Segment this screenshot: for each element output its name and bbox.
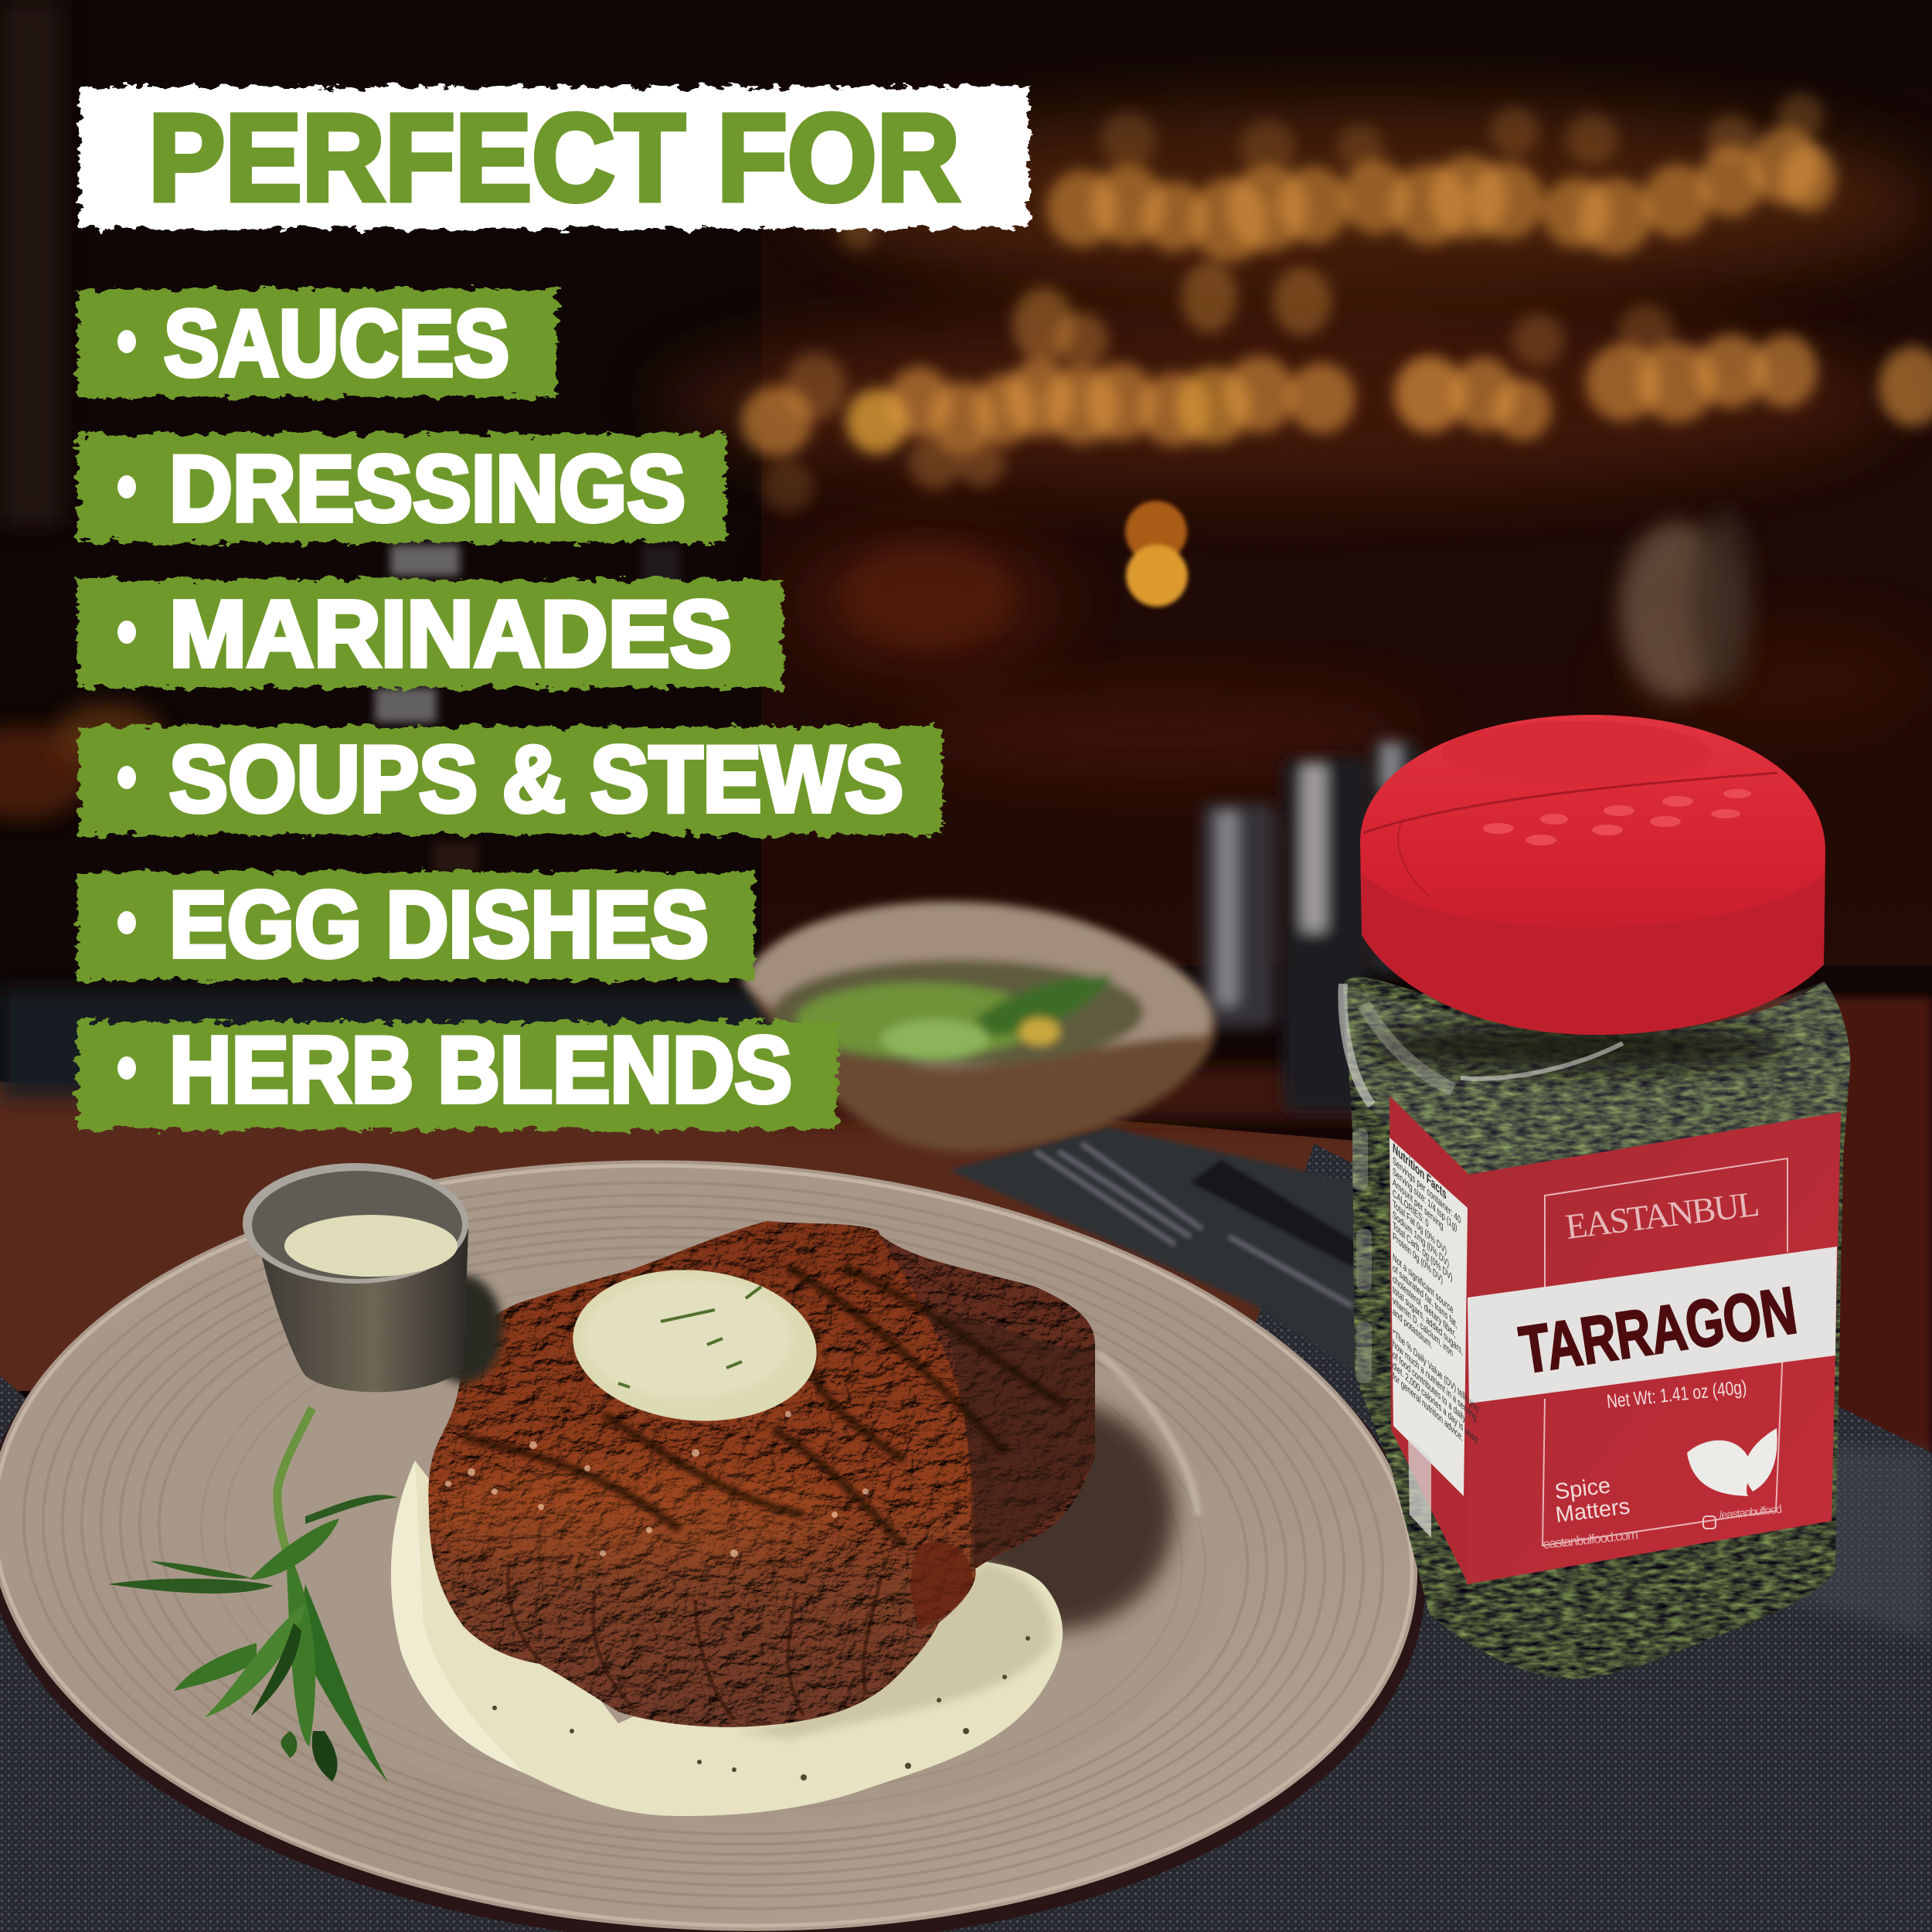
list item: herb blends: HERB BLENDS bbox=[169, 1017, 792, 1122]
sauce pool bbox=[391, 1461, 1063, 1816]
list item: sauces: SAUCES bbox=[164, 291, 509, 396]
nutrition panel: Servings per container: 40 bbox=[1393, 1155, 1461, 1226]
nutrition panel: Amount per serving bbox=[1393, 1176, 1444, 1233]
list item: marinades: MARINADES bbox=[169, 581, 732, 686]
list item: egg dishes: EGG DISHES bbox=[169, 872, 709, 977]
nutrition panel: cholesterol, dietary fiber, bbox=[1393, 1273, 1456, 1341]
website: eastanbulfood.com bbox=[1542, 1527, 1639, 1552]
brand name: EASTANBUL bbox=[1563, 1184, 1761, 1247]
label front panel bbox=[1467, 1112, 1841, 1584]
steak bbox=[428, 1221, 1095, 1727]
wine glasses bbox=[375, 545, 680, 873]
nutrition panel: diet. 2,000 calories a day is used bbox=[1393, 1359, 1478, 1447]
background salad bowl bbox=[742, 902, 1216, 1151]
nutrition panel: CALORIES: 0 bbox=[1393, 1187, 1429, 1230]
label side panel bbox=[1389, 1096, 1469, 1586]
nutrition panel: Not a significant source bbox=[1393, 1251, 1454, 1317]
nutrition panel: of saturated fat, trans fat, bbox=[1393, 1262, 1458, 1331]
tagline second line: Matters bbox=[1554, 1494, 1631, 1528]
tarragon sprig bbox=[108, 1408, 398, 1782]
plate bbox=[0, 1124, 1446, 1932]
herb butter bbox=[566, 1260, 823, 1430]
QR code bbox=[1408, 1437, 1431, 1538]
nutrition panel: of food contributes to a daily bbox=[1393, 1349, 1466, 1425]
nutrition panel bbox=[1389, 1138, 1479, 1496]
product name: TARRAGON bbox=[1515, 1274, 1801, 1388]
nutrition panel: how much a nutrient in a serving bbox=[1393, 1338, 1477, 1424]
nutrition panel: Serving size: 1/4 tsp (1g) bbox=[1393, 1165, 1458, 1234]
background lights top row bbox=[839, 93, 1836, 263]
nutrition panel: Nutrition Facts bbox=[1393, 1140, 1447, 1203]
sauce ramekin bbox=[243, 1163, 502, 1392]
nutrition panel: for general nutrition advice. bbox=[1393, 1370, 1463, 1444]
heading banner: PERFECT FOR bbox=[148, 88, 960, 226]
net weight: Net Wt: 1.41 oz (40g) bbox=[1606, 1376, 1748, 1413]
nutrition panel: Protein 0g (0% DV) bbox=[1393, 1230, 1443, 1287]
nutrition panel: *The % Daily Value (DV) tells you bbox=[1393, 1327, 1479, 1415]
icon: instagram bbox=[1703, 1516, 1716, 1529]
label frame bbox=[1543, 1158, 1787, 1546]
background lights lower row bbox=[741, 262, 1932, 513]
nutrition panel: Sodium 1mg (0% DV) bbox=[1393, 1209, 1449, 1270]
table surface bbox=[0, 989, 1932, 1468]
tagline: Spice bbox=[1553, 1473, 1612, 1505]
label white band bbox=[1468, 1247, 1837, 1403]
hanging lamp reflection bbox=[1125, 501, 1188, 607]
nutrition panel: Total Carb. 0g (0% DV) bbox=[1393, 1219, 1453, 1284]
nutrition panel: total sugars, added sugars, bbox=[1393, 1284, 1463, 1358]
product jar bbox=[1342, 715, 1851, 1679]
jar cap bbox=[1360, 715, 1825, 1035]
table cloth bbox=[0, 1144, 1932, 1932]
cutlery on cloth bbox=[949, 1128, 1360, 1376]
list item: dressings: DRESSINGS bbox=[169, 436, 685, 541]
jar body bbox=[1343, 977, 1850, 1679]
pepper mills bbox=[1202, 742, 1418, 1113]
icon: leaves bbox=[1687, 1428, 1777, 1496]
instagram handle: /eastanbulfood bbox=[1719, 1502, 1783, 1522]
nutrition panel: Total Fat 0g (0% DV) bbox=[1393, 1198, 1447, 1257]
shaker holes bbox=[1483, 789, 1751, 845]
nutrition panel: and potassium. bbox=[1393, 1305, 1432, 1352]
nutrition panel: vitamin D, calcium, iron bbox=[1393, 1294, 1453, 1359]
list item: soups and stews: SOUPS & STEWS bbox=[169, 726, 903, 832]
